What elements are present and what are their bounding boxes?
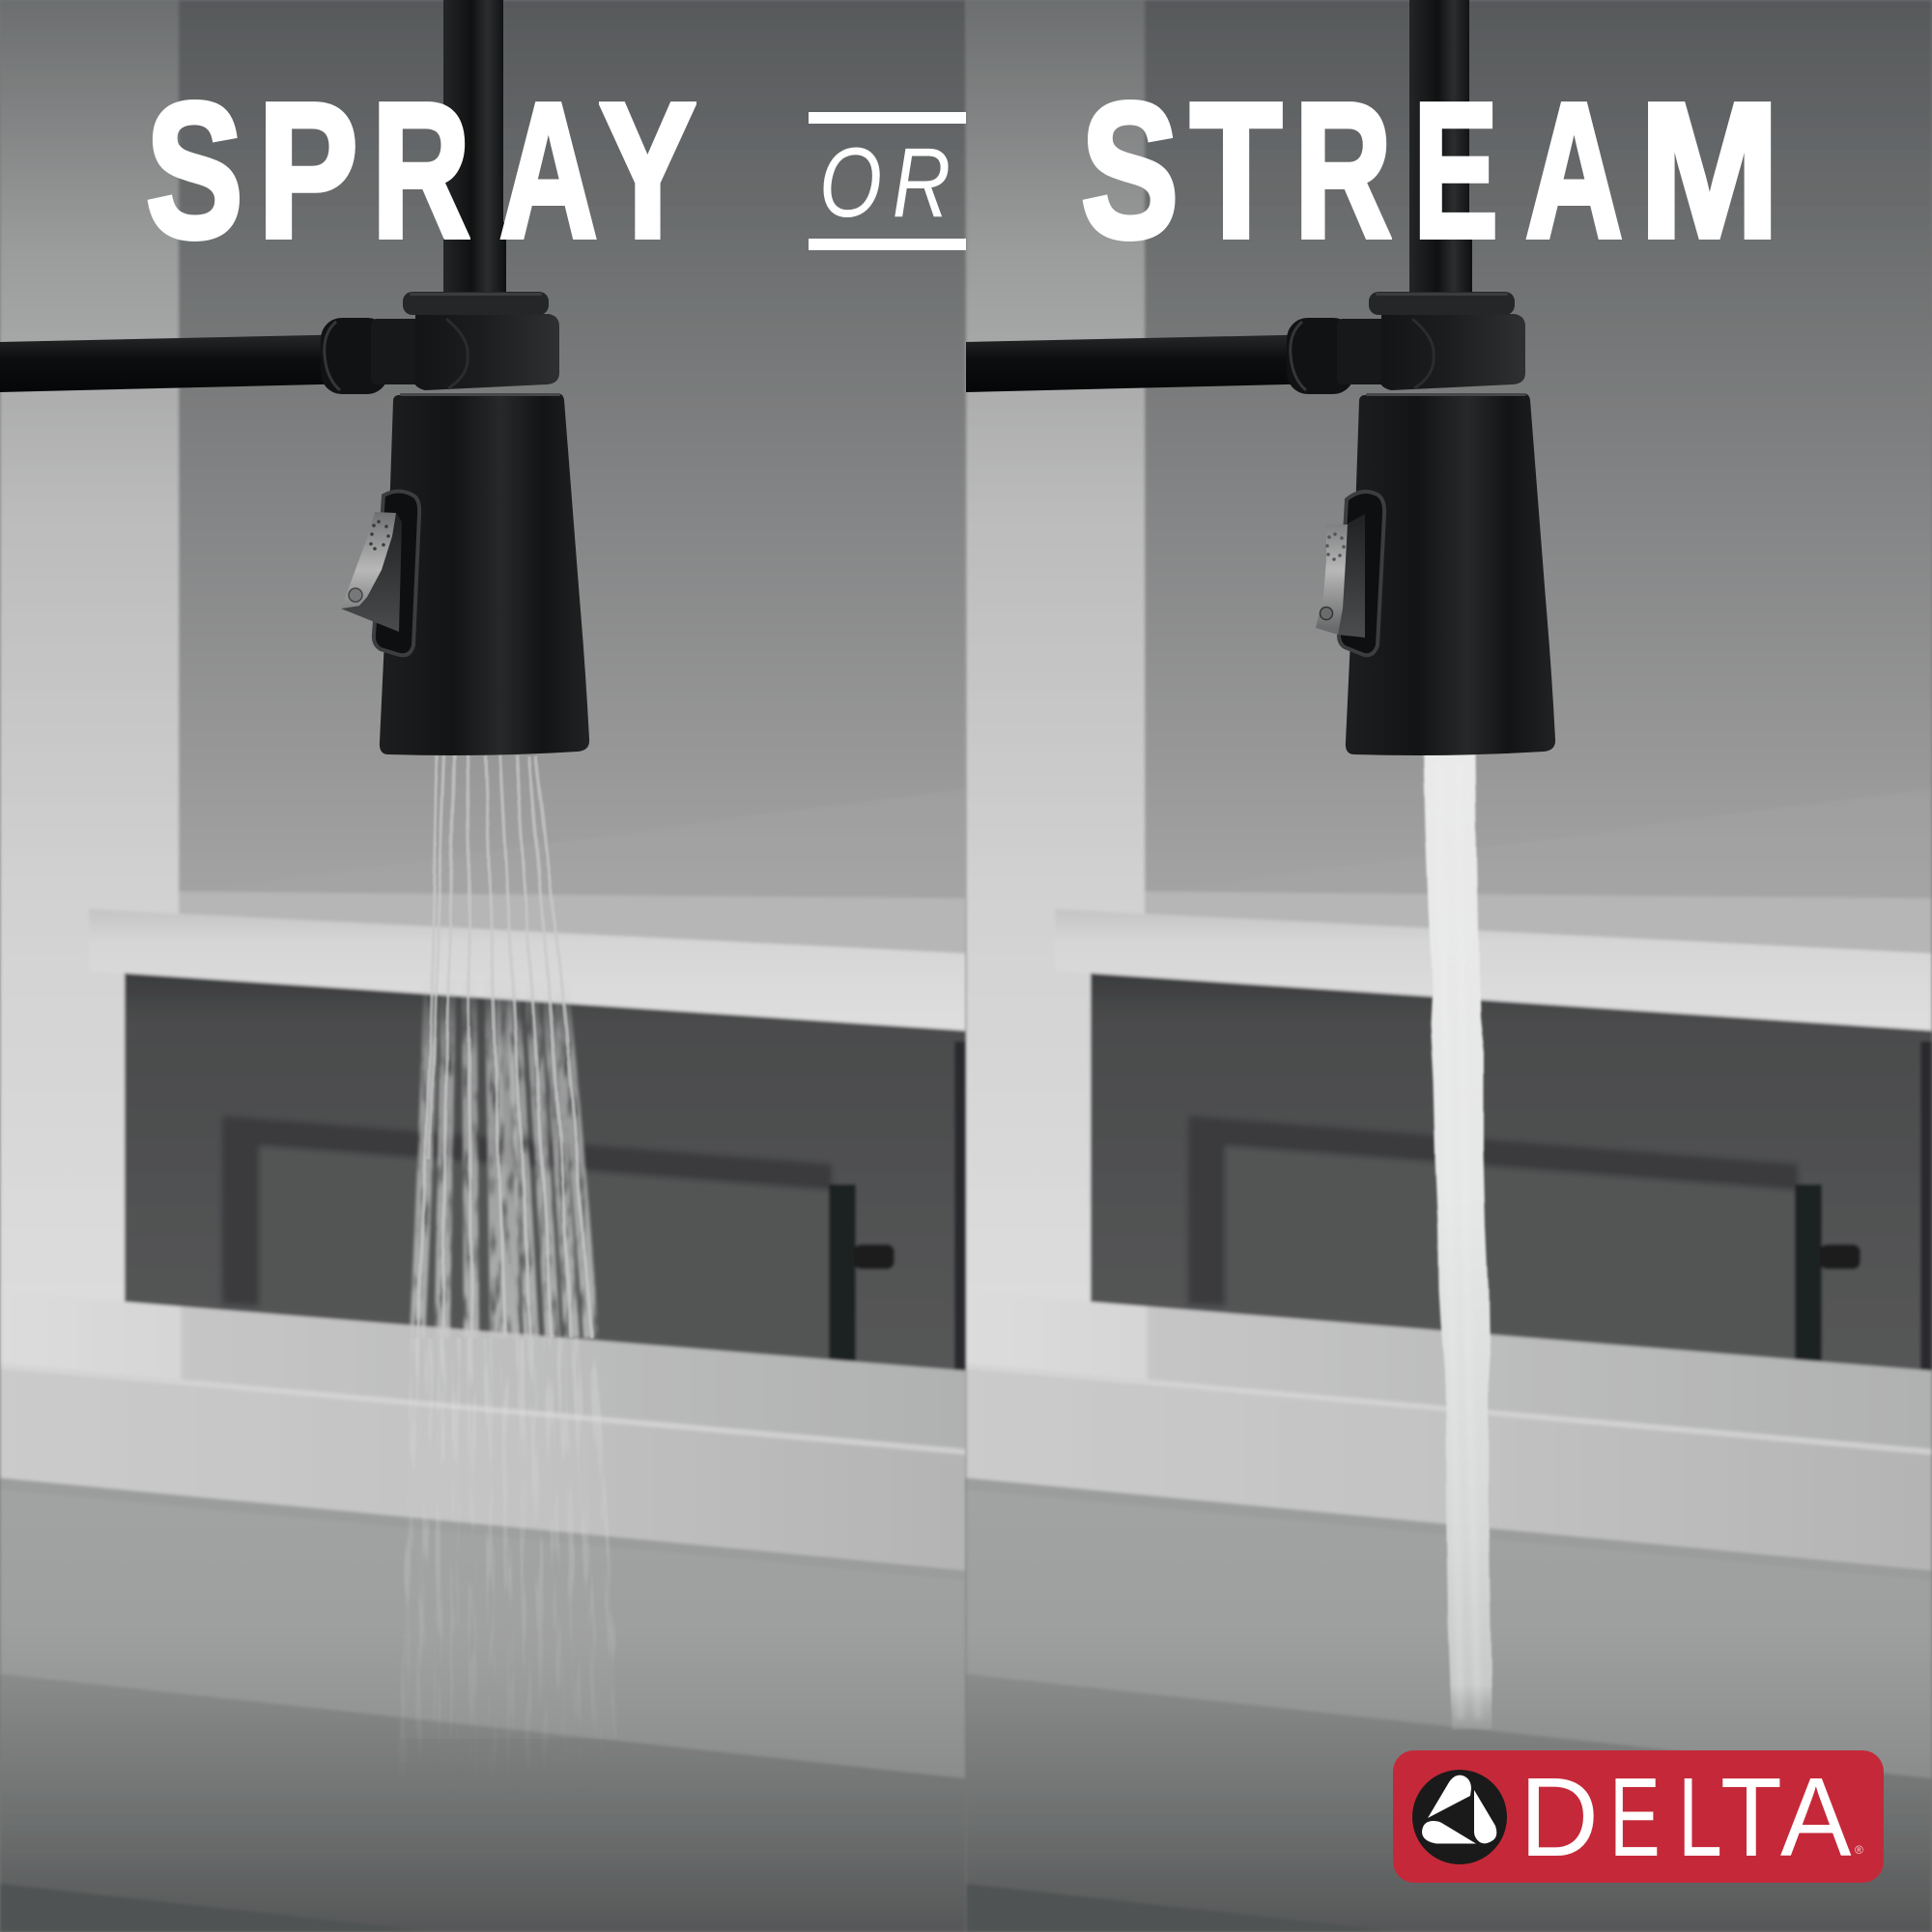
shelf front: [89, 909, 966, 1031]
basin lower ledge: [0, 1884, 435, 1932]
trigger housing ring: [374, 491, 419, 655]
trigger housing ring: [1339, 492, 1384, 655]
trigger button: [1320, 607, 1333, 620]
OR rule: bottom: [809, 239, 966, 250]
sink basin: [0, 1674, 966, 1932]
logo: DELTA wordmark: T: [1720, 1754, 1782, 1880]
emblem left drop: [1422, 1821, 1476, 1843]
spray: droplets falling below: [402, 1338, 618, 1797]
OR rule: top: [809, 112, 966, 124]
heading: SPRAY: R: [372, 64, 469, 278]
heading: SPRAY: [146, 64, 696, 278]
stream column: [1424, 752, 1492, 1729]
heading: SPRAY: A: [499, 64, 597, 278]
sink wall: [0, 1478, 966, 1778]
OR label: OR: [819, 128, 961, 238]
tee joint bulge: [446, 319, 468, 388]
kitchen background: right panel: [966, 0, 1932, 1932]
dark cabinet: [125, 966, 966, 1371]
trigger spray dots: [1325, 532, 1346, 561]
heading: STREAM: E: [1413, 64, 1498, 278]
cabinet handle: [829, 1184, 895, 1361]
spray: thin upper strands: [417, 755, 591, 1338]
sink wall shadow: [0, 1478, 966, 1580]
pull-down hose: [0, 334, 359, 392]
emblem disc: [1412, 1770, 1507, 1864]
logo: DELTA wordmark: E: [1609, 1754, 1661, 1880]
heading: SPRAY: P: [258, 64, 358, 278]
spray water: left panel: [401, 755, 618, 1797]
logo: delta emblem: [1412, 1770, 1507, 1864]
spray: thick lower strands: [417, 755, 591, 1338]
heading: STREAM: A: [1525, 64, 1623, 278]
faucet hardware: right panel: [966, 0, 1555, 755]
heading: SPRAY: Y: [599, 64, 696, 278]
spray trigger: right panel: [1316, 492, 1384, 655]
back wall: [179, 0, 966, 903]
vertical pipe: [443, 0, 506, 299]
trigger silver strip: [1316, 525, 1348, 635]
spray: wide haze: [401, 1338, 618, 1739]
trigger silver strip: [341, 512, 396, 609]
stream water: right panel: [1424, 752, 1492, 1729]
back counter ledge: [0, 1292, 966, 1450]
heading: STREAM: R: [1294, 64, 1392, 278]
trigger button: [349, 588, 362, 602]
spray head body: [380, 393, 589, 755]
heading: STREAM: M: [1639, 64, 1779, 278]
spray trigger: left panel: [341, 491, 419, 655]
logo: DELTA wordmark: D: [1520, 1754, 1599, 1880]
heading: STREAM: S: [1081, 64, 1179, 278]
cabinet door frame shadow: [222, 1116, 832, 1306]
hose sleeve: [371, 319, 468, 384]
logo: red badge: [1393, 1750, 1884, 1883]
heading: STREAM: [1081, 64, 1779, 278]
hose nut: [321, 318, 388, 394]
heading: STREAM: T: [1190, 64, 1282, 278]
faucet hardware: left panel: [0, 0, 589, 755]
trigger dark face: [1338, 514, 1365, 638]
head top rim: [400, 393, 560, 396]
emblem top drop: [1428, 1776, 1471, 1818]
counter front edge: [0, 1364, 966, 1571]
trigger spray dots: [369, 520, 390, 551]
wall reflection wedge: [179, 788, 966, 903]
right cabinet edge: [954, 1041, 966, 1372]
heading: SPRAY: S: [146, 64, 242, 278]
cabinet door panel: [259, 1146, 832, 1357]
left wall column: [0, 0, 179, 1323]
collar: [414, 314, 559, 390]
cabinet door: [222, 1116, 832, 1357]
logo: DELTA wordmark: ®: [1855, 1843, 1863, 1857]
logo: DELTA wordmark: A: [1780, 1754, 1852, 1880]
shelf top surface: [179, 892, 966, 954]
stream streaks: [1439, 763, 1478, 1719]
trigger dark face: [341, 513, 402, 632]
emblem right drop: [1474, 1790, 1496, 1843]
kitchen background: left panel: [0, 0, 966, 1932]
flange: [403, 292, 549, 315]
logo: DELTA wordmark: L: [1677, 1754, 1721, 1880]
counter edge highlight: [0, 1363, 966, 1455]
